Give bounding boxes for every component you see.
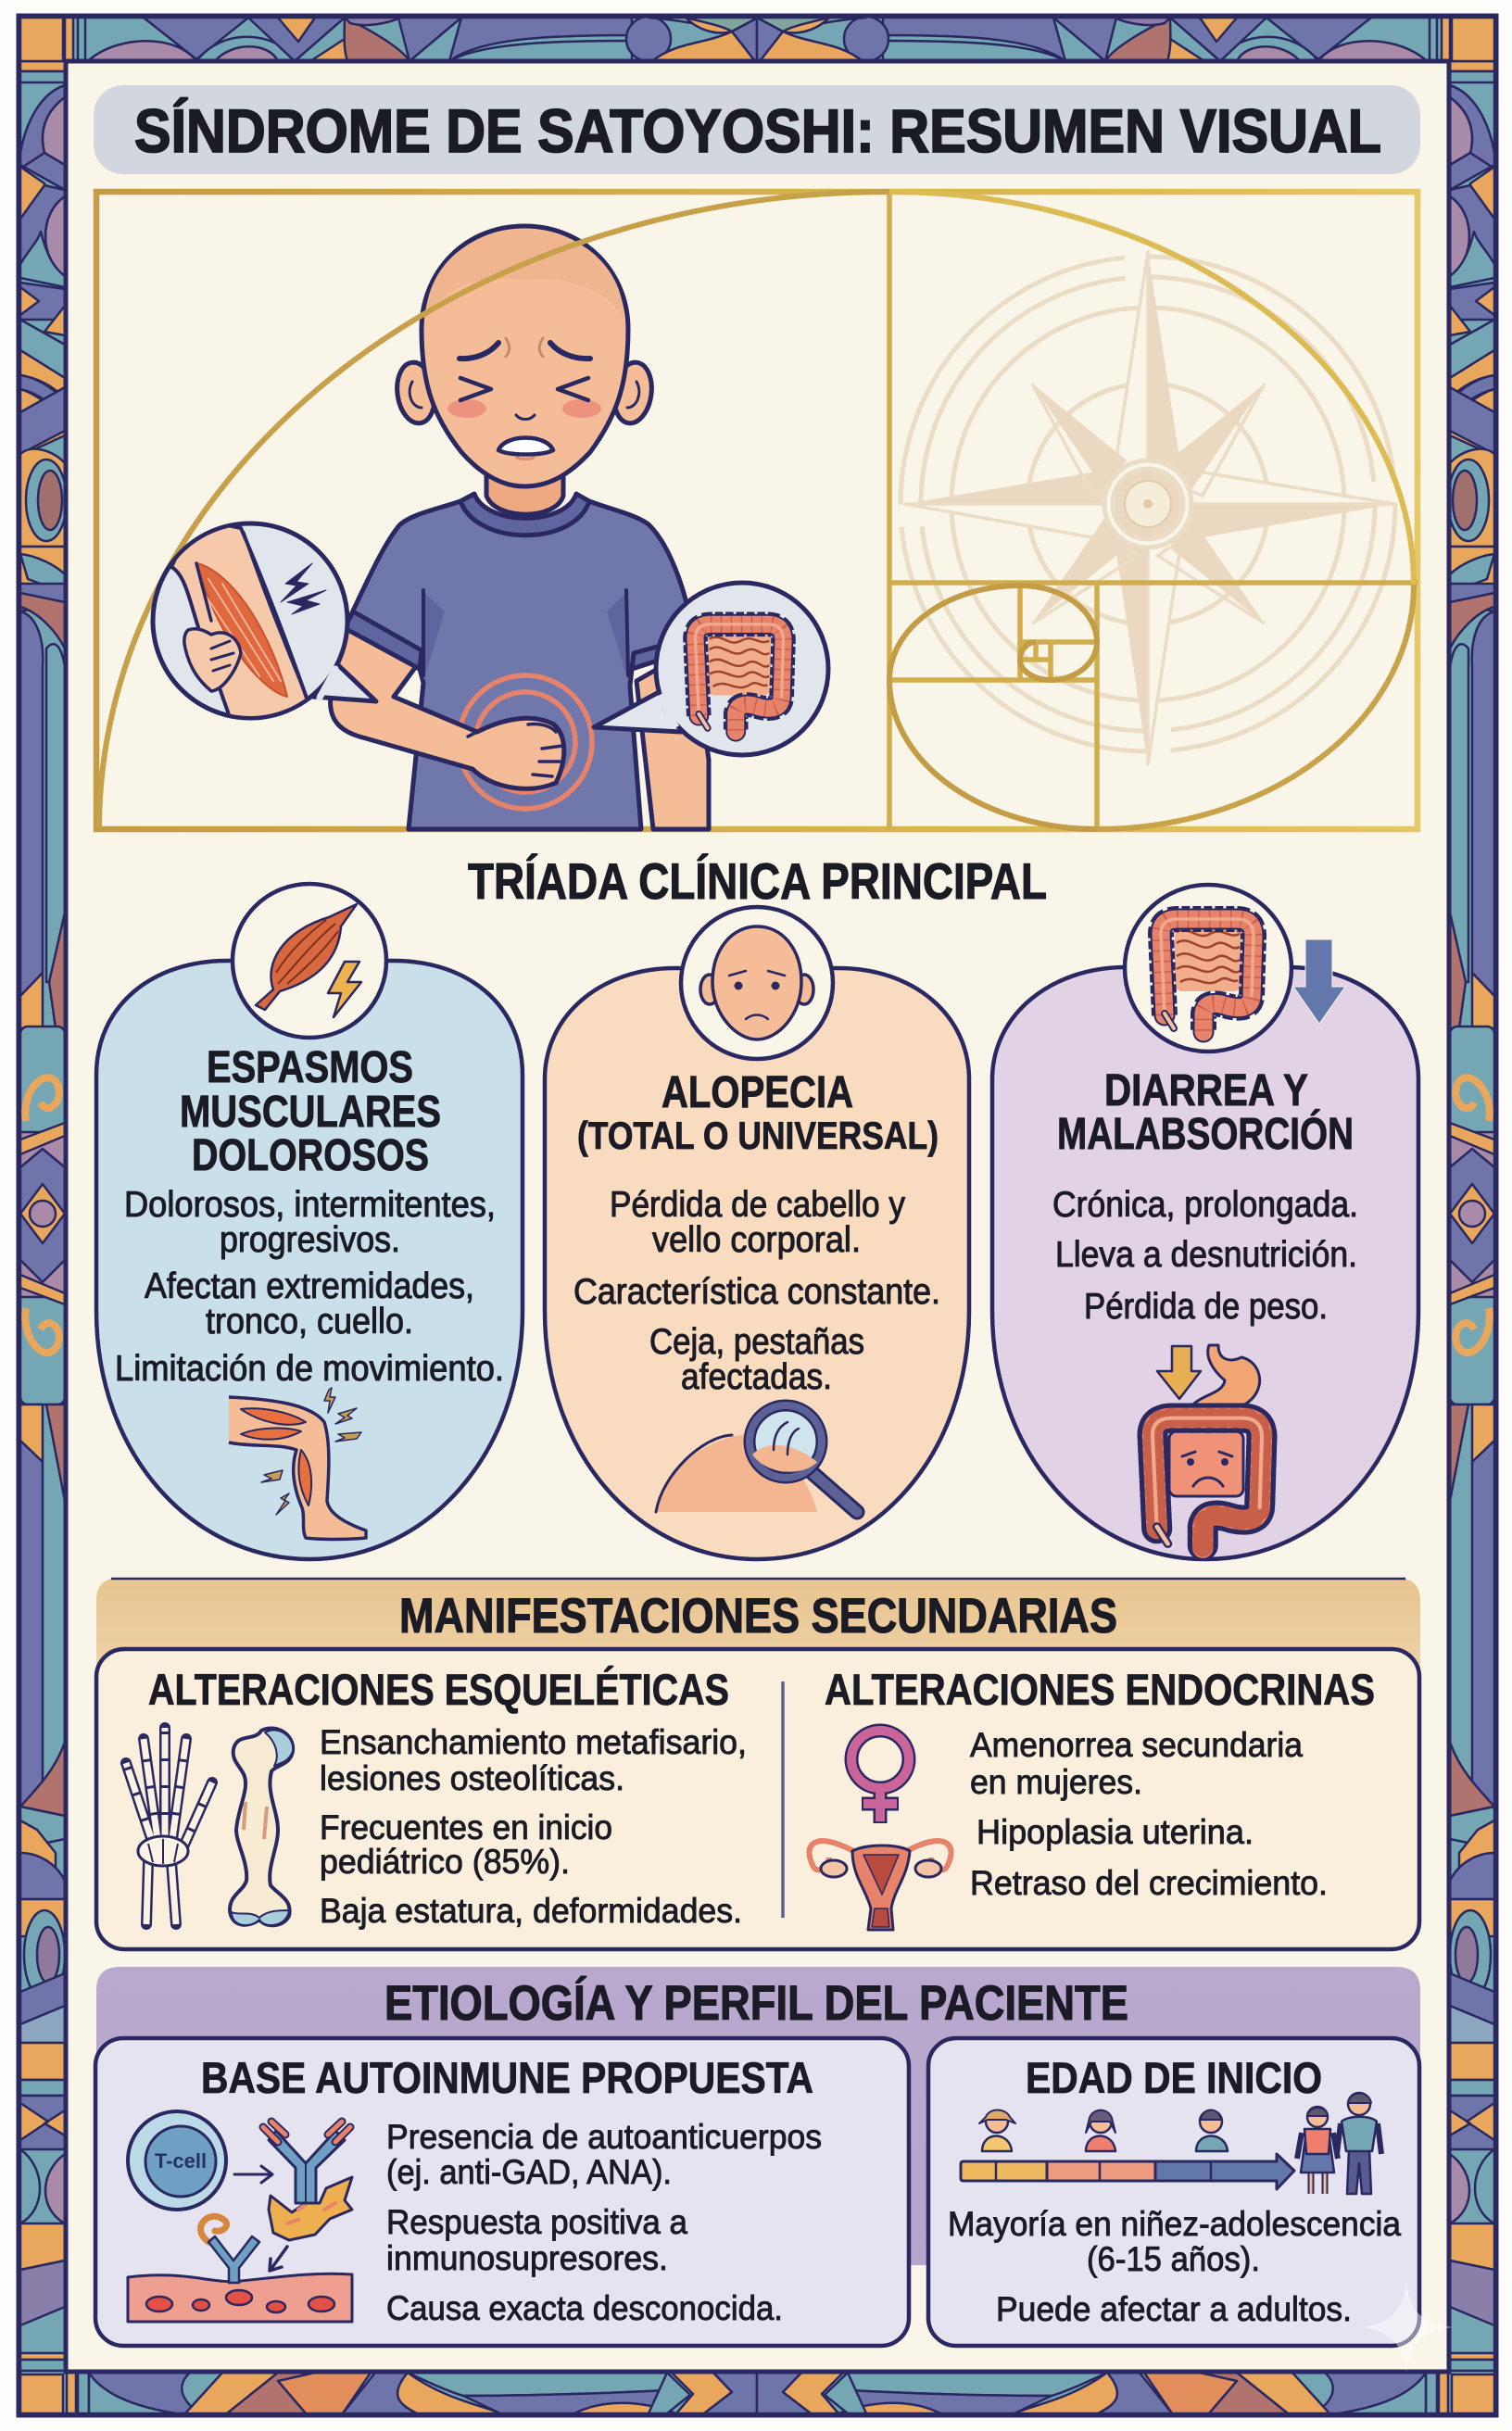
description: afectadas. bbox=[681, 1357, 832, 1397]
heading bbox=[577, 1068, 939, 1157]
ears bbox=[394, 360, 438, 425]
description: vello corporal. bbox=[652, 1220, 861, 1260]
text block: Puede afectar a adultos. bbox=[996, 2290, 1352, 2328]
endocrine text: Hipoplasia uterina. bbox=[976, 1813, 1254, 1851]
description bbox=[1052, 1185, 1358, 1327]
title text: SÍNDROME DE SATOYOSHI: RESUMEN VISUAL bbox=[134, 96, 1381, 165]
card: edad de inicio bbox=[928, 2038, 1419, 2346]
endocrine text: Amenorrea secundaria bbox=[970, 1726, 1303, 1764]
heading: ESPASMOS bbox=[207, 1043, 413, 1092]
text block: Presencia de autoanticuerpos bbox=[386, 2118, 822, 2156]
blush bbox=[447, 399, 486, 418]
description: progresivos. bbox=[220, 1220, 400, 1260]
icon: down arrow bbox=[1293, 939, 1345, 1024]
card: base autoinmune bbox=[95, 2038, 909, 2346]
description: Lleva a desnutrición. bbox=[1055, 1235, 1357, 1275]
sub-heading: endocrine: ALTERACIONES ENDOCRINAS bbox=[825, 1665, 1375, 1714]
section title: triad: TRÍADA CLÍNICA PRINCIPAL bbox=[468, 852, 1047, 910]
content card bbox=[96, 1649, 1419, 1949]
icon: leg cramp bbox=[229, 1388, 366, 1540]
right arm bbox=[636, 649, 709, 829]
skeletal text: Ensanchamiento metafisario, bbox=[320, 1723, 747, 1761]
heading bbox=[1057, 1066, 1354, 1159]
heading: ALOPECIA bbox=[662, 1068, 853, 1117]
icon: hand skeleton bbox=[126, 1728, 212, 1924]
description: Dolorosos, intermitentes, bbox=[124, 1185, 496, 1225]
icon: child 3 bbox=[1196, 2110, 1228, 2151]
heading: DOLOROSOS bbox=[192, 1131, 429, 1180]
sparkle watermark bbox=[1362, 2283, 1453, 2372]
text block: Respuesta positiva a bbox=[386, 2203, 687, 2241]
collar bbox=[460, 494, 589, 535]
text block: Mayoría en niñez-adolescencia bbox=[948, 2205, 1401, 2243]
golden spiral bbox=[99, 192, 1414, 829]
callout: muscle spasm bbox=[153, 519, 376, 723]
icon: femur bbox=[230, 1728, 293, 1925]
heading bbox=[180, 1043, 441, 1180]
description bbox=[115, 1185, 504, 1389]
golden rectangle grid bbox=[96, 192, 1418, 829]
lightning bolts bbox=[281, 563, 326, 614]
sleeve hems bbox=[345, 611, 422, 669]
icon: sad intestine and stomach bbox=[1153, 1345, 1262, 1548]
title banner bbox=[94, 85, 1420, 174]
text block: (ej. anti-GAD, ANA). bbox=[386, 2153, 672, 2191]
text block bbox=[386, 2118, 822, 2327]
description: Afectan extremidades, bbox=[145, 1266, 474, 1306]
T-cell label: T-cell bbox=[155, 2149, 207, 2173]
text block: inmunosupresores. bbox=[386, 2239, 668, 2277]
heading: ETIOLOGÍA Y PERFIL DEL PACIENTE bbox=[384, 1975, 1128, 2031]
compass rose watermark bbox=[901, 252, 1395, 764]
text block: (6-15 años). bbox=[1087, 2240, 1260, 2278]
description: Pérdida de peso. bbox=[1084, 1287, 1328, 1327]
icon: child 1 bbox=[979, 2110, 1015, 2151]
skeletal text: Frecuentes en inicio bbox=[320, 1808, 612, 1846]
icon: teen girl bbox=[1297, 2107, 1338, 2194]
icon: bald face bbox=[681, 907, 833, 1059]
nose bbox=[516, 415, 535, 419]
heading: MUSCULARES bbox=[180, 1088, 441, 1137]
colon icon bbox=[695, 624, 784, 732]
heading: (TOTAL O UNIVERSAL) bbox=[577, 1114, 939, 1157]
description bbox=[573, 1185, 940, 1397]
closed eyes bbox=[460, 378, 588, 400]
bent arm and fist bbox=[331, 623, 564, 788]
callout: intestine bbox=[594, 583, 828, 755]
heading: DIARREA Y bbox=[1104, 1066, 1308, 1115]
endocrine text: en mujeres. bbox=[970, 1763, 1142, 1801]
icon: uterus bbox=[809, 1841, 951, 1930]
skeletal text: Baja estatura, deformidades. bbox=[320, 1892, 742, 1930]
icon: adult bbox=[1337, 2093, 1381, 2194]
endocrine text: Retraso del crecimiento. bbox=[970, 1864, 1328, 1902]
mouth bbox=[498, 437, 553, 454]
description: tronco, cuello. bbox=[206, 1302, 413, 1341]
sub-heading: BASE AUTOINMUNE PROPUESTA bbox=[201, 2053, 813, 2102]
t-shirt bbox=[347, 501, 695, 829]
text block: Causa exacta desconocida. bbox=[386, 2289, 783, 2327]
skeletal text: lesiones osteolíticas. bbox=[320, 1759, 624, 1797]
heading: MALABSORCIÓN bbox=[1057, 1108, 1354, 1159]
boy illustration bbox=[331, 226, 709, 829]
description: Limitación de movimiento. bbox=[115, 1349, 504, 1389]
head bbox=[422, 226, 628, 486]
description: Crónica, prolongada. bbox=[1052, 1185, 1358, 1225]
icon: autoimmune diagram bbox=[128, 2111, 352, 2322]
chart: age timeline bbox=[961, 2093, 1381, 2194]
pain rings bbox=[459, 675, 592, 809]
panel: espasmos bbox=[96, 884, 523, 1559]
icon: female symbol bbox=[851, 1731, 909, 1823]
brows bbox=[460, 343, 590, 359]
skeletal text: pediátrico (85%). bbox=[320, 1843, 570, 1881]
description: Pérdida de cabello y bbox=[610, 1185, 905, 1225]
description: Ceja, pestañas bbox=[649, 1322, 864, 1362]
heading: MANIFESTACIONES SECUNDARIAS bbox=[399, 1589, 1117, 1644]
icon: intestine bbox=[1125, 885, 1292, 1052]
icon: magnifier on scalp bbox=[656, 1405, 857, 1512]
panel: alopecia bbox=[545, 907, 969, 1559]
panel: etiología y perfil bbox=[95, 1967, 1420, 2346]
description: Característica constante. bbox=[573, 1272, 940, 1312]
text block bbox=[948, 2205, 1401, 2328]
sub-heading: skeletal: ALTERACIONES ESQUELÉTICAS bbox=[148, 1665, 729, 1714]
panel: manifestaciones secundarias bbox=[96, 1578, 1420, 1949]
icon: muscle with bolt bbox=[233, 884, 386, 1038]
neck bbox=[486, 468, 563, 514]
endocrine text bbox=[970, 1726, 1328, 1902]
panel: diarrea bbox=[992, 885, 1418, 1559]
sub-heading: EDAD DE INICIO bbox=[1026, 2053, 1322, 2102]
gripping hand bbox=[184, 629, 241, 691]
skeletal text bbox=[320, 1723, 747, 1930]
icon: child 2 bbox=[1086, 2110, 1115, 2151]
